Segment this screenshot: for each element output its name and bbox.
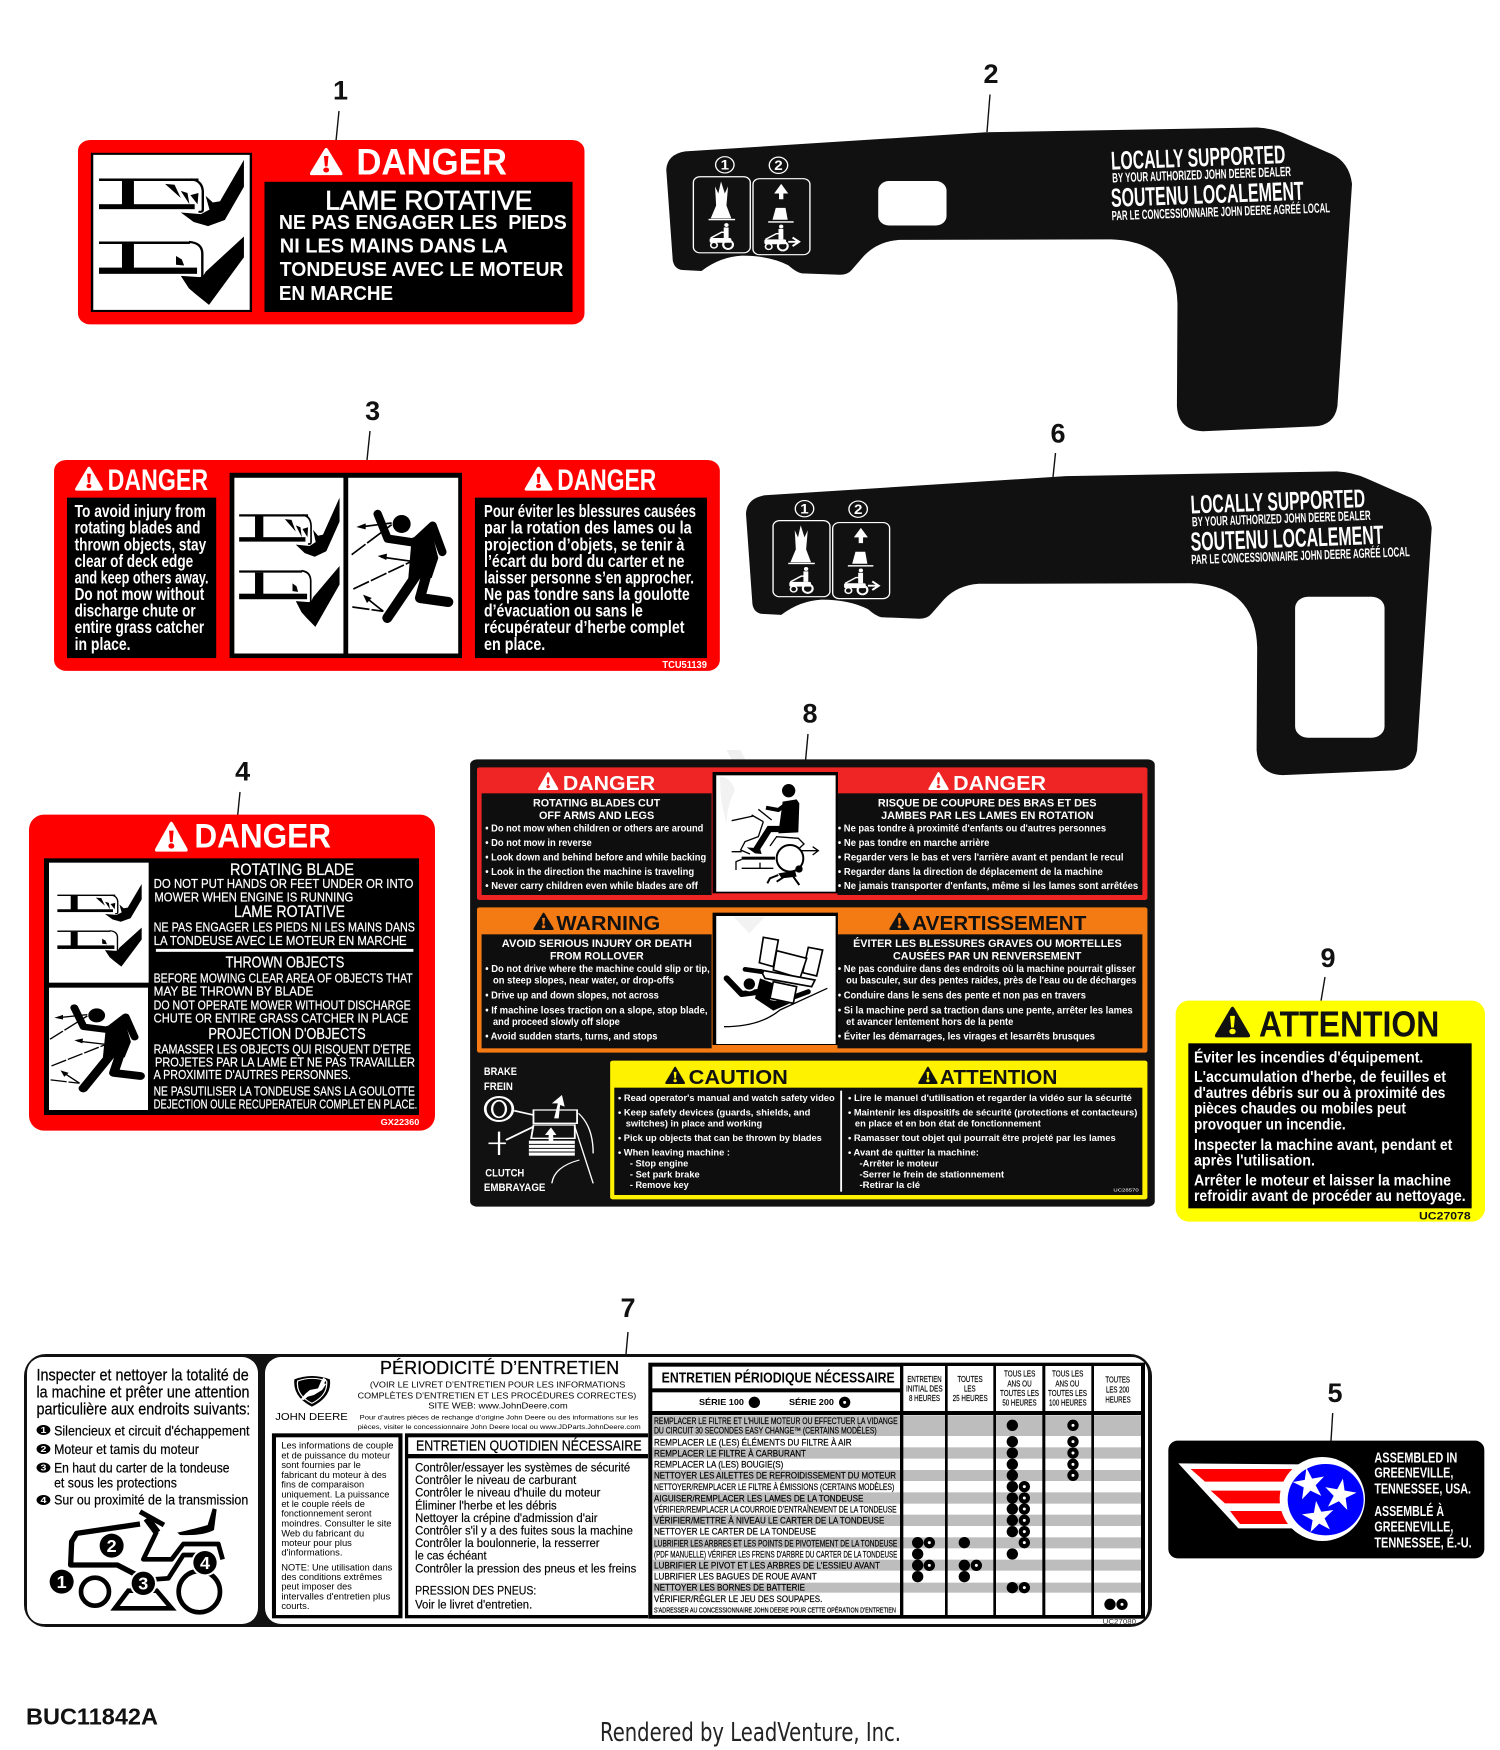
- text block: torque note: Les informations de couple: [281, 1442, 394, 1451]
- icon: brake and clutch: [484, 1065, 593, 1193]
- icon: brake and clutch: BRAKE: [484, 1065, 517, 1077]
- text block: french caution: en place et en bon état de fonctionnement: [855, 1119, 1041, 1129]
- title: periodicite d'entretien: Pour d’autres pièces de rechange d’origine John Deere ou des informations sur les: [360, 1413, 639, 1421]
- text block: french warning: d’évacuation ou sans le: [484, 601, 643, 620]
- text block: french caution: • Ramasser tout objet qui pourrait être projeté par les lames: [848, 1134, 1116, 1143]
- text block: inspection intro: particulière aux endroits suivants:: [37, 1399, 250, 1418]
- heading: caution: CAUTION: [689, 1066, 788, 1089]
- text block: torque note: d'informations.: [281, 1549, 343, 1558]
- text block: english warning: FROM ROLLOVER: [550, 949, 644, 962]
- text block: english danger: ROTATING BLADES CUT: [533, 797, 660, 809]
- heading: danger: DANGER: [356, 141, 507, 183]
- text block: warnings: A PROXIMITE D'AUTRES PERSONNES.: [154, 1067, 351, 1082]
- panel: red danger band: [477, 767, 1147, 900]
- text block: torque note: moindres. Consulter le site: [281, 1520, 392, 1529]
- text block: fire warning: provoquer un incendie.: [1194, 1116, 1346, 1133]
- icon: brake and clutch: CLUTCH: [485, 1167, 524, 1179]
- text block: french warning: • Ne pas conduire dans des endroits où la machine pourrait glisser: [838, 964, 1136, 974]
- text block: fire warning: Inspecter la machine avant, pendant et: [1194, 1137, 1452, 1154]
- heading: danger french: DANGER: [953, 772, 1046, 795]
- text block: english warning: AVOID SERIOUS INJURY OR DEATH: [502, 937, 692, 949]
- table rows: DU CIRCUIT 30 SECONDES EASY CHANGE™ (CERTAINS MODÈLES): [654, 1425, 877, 1435]
- callout number 7: [620, 1293, 636, 1354]
- callout number 8: 8: [802, 698, 818, 728]
- text block: fire warning: d'autres débris sur ou à proximité des: [1194, 1085, 1445, 1102]
- list: inspection points: 1: [41, 1426, 47, 1436]
- text block: english warning: and proceed slowly off slope: [493, 1017, 620, 1027]
- text block: english warning: [485, 937, 710, 1042]
- text block: english warning: entire grass catcher: [75, 617, 205, 637]
- text block: french caution: • Lire le manuel d'utilisation et regarder la vidéo sur la sécurité: [848, 1094, 1132, 1103]
- text block: english danger: [485, 797, 706, 891]
- icon: mower rollover: [713, 913, 838, 1045]
- text block: daily maintenance: ENTRETIEN QUOTIDIEN NÉCESSAIRE: [416, 1437, 642, 1454]
- text block: french warning: • Conduire dans le sens des pente et non pas en travers: [838, 990, 1086, 1001]
- callout number 8: [802, 698, 818, 760]
- list: inspection points: En haut du carter de la tondeuse: [54, 1461, 230, 1476]
- text block: fire warning: L'accumulation d'herbe, de feuilles et: [1194, 1069, 1446, 1086]
- heading: warning: [533, 912, 660, 935]
- text block: warnings: PROJECTION D'OBJECTS: [208, 1026, 366, 1043]
- table header: ENTRETIEN: [907, 1374, 942, 1384]
- table rows: NETTOYER LES AILETTES DE REFROIDISSEMENT DU MOTEUR: [654, 1471, 896, 1481]
- panel: decal 9 attention: [1176, 1001, 1485, 1222]
- heading: attention: ATTENTION: [1259, 1004, 1439, 1045]
- icon: tennessee wing and stars: [1178, 1457, 1365, 1541]
- list: inspection points: [37, 1424, 250, 1508]
- text block: daily maintenance: Contrôler le niveau d'huile du moteur: [415, 1486, 601, 1499]
- table header: HEURES: [1105, 1394, 1131, 1404]
- text block: french warning: et avancer lentement hors de la pente: [846, 1017, 1014, 1027]
- text block: daily maintenance: Nettoyer la crépine d'admission d'air: [415, 1511, 598, 1525]
- icon: warning triangle: [310, 148, 343, 175]
- text block: torque note: des conditions extrêmes: [281, 1573, 382, 1583]
- heading: right danger: [525, 463, 656, 497]
- text block: warnings: THROWN OBJECTS: [226, 954, 344, 971]
- table rows: REMPLACER LE FILTRE À CARBURANT: [654, 1449, 806, 1459]
- callout number 3: [365, 396, 380, 460]
- text block: assembled location: GREENEVILLE,: [1374, 1520, 1453, 1536]
- text block: french warning: NE PAS ENGAGER LES PIEDS: [279, 211, 567, 234]
- text block: french caution: UC28570: [1113, 1188, 1139, 1193]
- text block: warnings: [154, 860, 417, 1111]
- text block: french warning: Pour éviter les blessures causées: [484, 501, 696, 521]
- text block: english warning: • Avoid sudden starts, turns, and stops: [485, 1031, 657, 1042]
- list: inspection points: 3: [41, 1464, 47, 1473]
- callout number 3: 3: [365, 396, 380, 426]
- text block: english caution: - Set park brake: [630, 1170, 700, 1180]
- text block: french warning: [838, 937, 1136, 1042]
- text block: french warning: l’écart du bord du carter et ne: [484, 551, 684, 571]
- icon: lawn tractor with numbers: [50, 1508, 223, 1612]
- text block: torque note: uniquement. La puissance: [281, 1490, 390, 1500]
- text block: fire warning: Éviter les incendies d'équipement.: [1194, 1049, 1423, 1066]
- text block: english caution: [618, 1094, 835, 1190]
- text block: torque note: intervalles d'entretien plus: [281, 1592, 390, 1602]
- text block: warnings: LAME ROTATIVE: [234, 902, 345, 921]
- text block: warnings: ROTATING BLADE: [230, 860, 354, 879]
- callout number 4: 4: [235, 757, 250, 787]
- text block: inspection intro: [37, 1365, 250, 1418]
- text block: daily maintenance: Contrôler la boulonnerie, la resserrer: [415, 1536, 600, 1550]
- text block: english warning: • Drive up and down slopes, not across: [485, 990, 659, 1001]
- text block: warnings: DO NOT OPERATE MOWER WITHOUT DISCHARGE: [154, 998, 411, 1013]
- text block: torque note: et le couple réels de: [281, 1500, 365, 1510]
- part code: UC27080: [1103, 1617, 1136, 1626]
- title: periodicite d'entretien: (VOIR LE LIVRET D’ENTRETIEN POUR LES INFORMATIONS: [370, 1381, 625, 1389]
- callout number 1: 1: [333, 76, 348, 106]
- text block: english warning: [67, 498, 216, 658]
- table header: TOUTES: [1105, 1375, 1130, 1385]
- list: inspection points: Moteur et tamis du moteur: [54, 1442, 199, 1458]
- icon: blade and foot: [91, 153, 252, 312]
- panel: decal 5 assembled in tennessee: [1168, 1441, 1484, 1558]
- callout number 5: [1327, 1378, 1343, 1441]
- text block: french warning: laisser personne s’en approcher.: [484, 568, 694, 587]
- text block: fire warning: après l'utilisation.: [1194, 1152, 1315, 1169]
- table rows: S'ADRESSER AU CONCESSIONNAIRE JOHN DEERE POUR CETTE OPÉRATION D'ENTRETIEN: [654, 1606, 896, 1615]
- text block: french danger: • Ne pas tondre à proximité d'enfants ou d'autres personnes: [838, 823, 1106, 834]
- table dots: series 100: [912, 1420, 1116, 1610]
- text block: english danger: • Do not mow in reverse: [485, 838, 592, 848]
- part code: UC27078: [1419, 1210, 1471, 1222]
- table header: ENTRETIEN PÉRIODIQUE NÉCESSAIRE: [662, 1370, 895, 1387]
- text block: french caution: -Retirar la clé: [860, 1181, 920, 1190]
- panel: decal 4 danger rotating blade: [29, 815, 435, 1131]
- text block: english caution: • Read operator's manual and watch safety video: [618, 1094, 835, 1103]
- text block: french warning: par la rotation des lames ou la: [484, 518, 692, 537]
- text block: english warning: rotating blades and: [75, 518, 200, 537]
- title: periodicite d'entretien: pièces, visiter le concessionnaire John Deere local ou www.JDParts.JohnDeere.com: [358, 1423, 641, 1431]
- text block: english warning: discharge chute or: [75, 601, 196, 620]
- text block: english caution: switches) in place and working: [626, 1119, 762, 1129]
- panel: yellow caution band: [610, 1061, 1147, 1199]
- icon: lawn tractor with numbers: 1: [57, 1572, 67, 1592]
- text block: french warning: Ne pas tondre sans la goulotte: [484, 584, 690, 604]
- callout number 5: 5: [1327, 1378, 1343, 1408]
- text block: torque note: fonctionnement seront: [281, 1510, 372, 1519]
- text block: torque note: moteur pour plus: [281, 1539, 352, 1549]
- callout number 2: [983, 59, 999, 132]
- text block: daily maintenance: Contrôler la pression des pneus et les freins: [415, 1562, 637, 1575]
- title: periodicite d'entretien: COMPLÈTES D’ENTRETIEN ET LES PROCÉDURES CORRECTES): [358, 1391, 636, 1400]
- table: periodic maintenance: [648, 1363, 1145, 1626]
- text block: warnings: NE PASUTILISER LA TONDEUSE SANS LA GOULOTTE: [154, 1083, 415, 1098]
- icon: lawn tractor with numbers: 2: [107, 1536, 117, 1556]
- text block: assembled location: [1374, 1451, 1472, 1551]
- table rows: LUBRIFIER LE PIVOT ET LES ARBRES DE L'ESSIEU AVANT: [654, 1561, 880, 1571]
- table rows: REMPLACER LE FILTRE ET L'HUILE MOTEUR OU EFFECTUER LA VIDANGE: [654, 1416, 898, 1426]
- text block: assembled location: ASSEMBLÉ À: [1374, 1503, 1444, 1520]
- text block: french danger: • Ne pas tondre en marche arrière: [838, 838, 990, 848]
- text block: french warning: ou basculer, sur des pentes raides, près de l'eau ou de décharges: [846, 975, 1136, 986]
- icon: rider and child: [713, 772, 838, 893]
- text block: daily maintenance: PRESSION DES PNEUS:: [415, 1584, 536, 1597]
- text block: warnings: RAMASSER LES OBJECTS QUI RISQUENT D'ETRE: [154, 1042, 411, 1057]
- text block: french warning: EN MARCHE: [279, 281, 393, 305]
- text block: warnings: MAY BE THROWN BY BLADE: [154, 983, 313, 998]
- list: inspection points: 4: [41, 1496, 47, 1506]
- text block: english warning: clear of deck edge: [75, 551, 193, 571]
- icon: lawn tractor with numbers: 4: [200, 1553, 210, 1573]
- table header: TOUTES LES: [1048, 1388, 1087, 1398]
- text block: english caution: • When leaving machine :: [618, 1148, 730, 1158]
- table header: 50 HEURES: [1002, 1398, 1037, 1408]
- text block: french warning: • Éviter les démarrages, les virages et lesarrêts brusques: [838, 1031, 1095, 1042]
- callout number 2: 2: [983, 59, 999, 89]
- icon: john deere logo: [275, 1376, 348, 1423]
- left and middle content: [37, 1358, 648, 1618]
- table header: LES 200: [1106, 1385, 1129, 1395]
- table header: [662, 1369, 1131, 1408]
- callout number 7: 7: [620, 1293, 636, 1323]
- list: inspection points: et sous les protections: [54, 1476, 177, 1491]
- text block: torque note: peut imposer des: [281, 1583, 352, 1592]
- table dots: series 200: [924, 1420, 1128, 1610]
- text block: daily maintenance: [405, 1433, 648, 1618]
- table rows: NETTOYER LE CARTER DE LA TONDEUSE: [654, 1527, 816, 1537]
- icons: blade and thrown objects: [44, 858, 419, 1115]
- panel: decal 1 danger rotating blade: [78, 140, 584, 324]
- text block: french warning: [475, 498, 707, 658]
- text block: french danger: RISQUE DE COUPURE DES BRAS ET DES: [878, 797, 1097, 809]
- text block: french warning: ÉVITER LES BLESSURES GRAVES OU MORTELLES: [853, 937, 1122, 949]
- table rows: AIGUISER/REMPLACER LES LAMES DE LA TONDEUSE: [654, 1493, 863, 1503]
- table rows: LUBRIFIER LES ARBRES ET LES POINTS DE PIVOTEMENT DE LA TONDEUSE: [654, 1538, 897, 1548]
- text block: warnings: PROJETES PAR LA LAME ET NE PAS TRAVAILLER: [155, 1054, 415, 1069]
- text block: english warning: on steep slopes, near water, or drop-offs: [493, 975, 674, 986]
- text block: english danger: OFF ARMS AND LEGS: [539, 809, 655, 821]
- text block: english warning: thrown objects, stay: [75, 535, 207, 554]
- heading: left danger: DANGER: [108, 463, 208, 497]
- text block: torque note: fabricant du moteur à des: [281, 1471, 387, 1481]
- text block: french caution: -Arrêter le moteur: [860, 1159, 939, 1169]
- part code: TCU51139: [662, 660, 707, 671]
- panel: decal 8 safety labels: [470, 750, 1155, 1207]
- text block: fire warning: [1188, 1043, 1472, 1208]
- heading: danger english: [538, 772, 655, 795]
- callout number 9: 9: [1320, 943, 1336, 973]
- text block: torque note: sont fournies par le: [281, 1461, 361, 1471]
- text block: fire warning: Arrêter le moteur et laisser la machine: [1194, 1172, 1451, 1189]
- text block: warnings: BEFORE MOWING CLEAR AREA OF OBJECTS THAT: [154, 971, 413, 986]
- table header: 8 HEURES: [909, 1393, 940, 1403]
- icon: brake and clutch: EMBRAYAGE: [484, 1181, 546, 1193]
- text block: warnings: CHUTE OR ENTIRE GRASS CATCHER IN PLACE: [154, 1011, 408, 1026]
- icon: john deere logo: JOHN DEERE: [275, 1412, 348, 1423]
- text block: french warning: • Si la machine perd sa traction dans une pente, arrêter les lames: [838, 1005, 1133, 1016]
- callout number 6: 6: [1050, 418, 1066, 448]
- text block: torque note: [272, 1433, 402, 1618]
- table rows: REMPLACER LE (LES) ÉLÉMENTS DU FILTRE À AIR: [654, 1437, 852, 1447]
- text block: french warning: NI LES MAINS DANS LA: [280, 234, 508, 257]
- callout number 4: [235, 757, 250, 815]
- table header: TOUTES LES: [1000, 1388, 1039, 1398]
- table header: TOUTES: [957, 1374, 983, 1384]
- text block: fire warning: refroidir avant de procéder au nettoyage.: [1194, 1188, 1466, 1205]
- text block: daily maintenance: Contrôler/essayer les systèmes de sécurité: [415, 1461, 630, 1474]
- table header: TOUS LES: [1052, 1369, 1083, 1379]
- part code: GX22360: [381, 1117, 420, 1127]
- text block: french warning: récupérateur d’herbe complet: [484, 617, 685, 637]
- text block: daily maintenance: Contrôler le niveau de carburant: [415, 1473, 577, 1487]
- heading: right danger: DANGER: [557, 463, 656, 497]
- text block: torque note: NOTE: Une utilisation dans: [281, 1563, 392, 1573]
- text block: english danger: • Never carry children even while blades are off: [485, 881, 698, 891]
- text block: torque note: et de puissance du moteur: [281, 1451, 391, 1461]
- table rows: NETTOYER/REMPLACER LE FILTRE À ÉMISSIONS (CERTAINS MODÈLES): [654, 1482, 894, 1492]
- table rows: NETTOYER LES BORNES DE BATTERIE: [654, 1583, 805, 1593]
- text block: fire warning: pièces chaudes ou mobiles peut: [1194, 1101, 1406, 1118]
- title: periodicite d'entretien: PÉRIODICITÉ D’ENTRETIEN: [380, 1358, 619, 1378]
- heading: danger english: DANGER: [563, 772, 655, 795]
- text block: warnings: DO NOT PUT HANDS OR FEET UNDER OR INTO: [154, 876, 413, 891]
- text block: assembled location: GREENEVILLE,: [1374, 1466, 1453, 1482]
- text block: french warning: CAUSÉES PAR UN RENVERSEMENT: [893, 949, 1081, 962]
- heading: danger french: [928, 772, 1046, 795]
- text block: french danger: • Regarder dans la direction de déplacement de la machine: [838, 867, 1103, 877]
- callout number 9: [1320, 943, 1336, 1001]
- table header: SÉRIE 200: [789, 1397, 834, 1407]
- table header: 100 HEURES: [1049, 1398, 1087, 1408]
- list: inspection points: Sur ou proximité de la transmission: [54, 1493, 248, 1508]
- text block: english caution: • Keep safety devices (guards, shields, and: [618, 1108, 810, 1118]
- title: periodicite d'entretien: [358, 1358, 641, 1431]
- text block: english warning: in place.: [75, 634, 131, 653]
- table header: SÉRIE 100: [699, 1397, 744, 1407]
- table rows: VÉRIFIER/RÉGLER LE JEU DES SOUPAPES.: [654, 1594, 822, 1604]
- panel: decal 7 maintenance: [24, 1354, 1152, 1627]
- text block: english warning: and keep others away.: [75, 568, 209, 587]
- renderer credit: Rendered by LeadVenture, Inc.: [600, 1718, 901, 1748]
- table header: 25 HEURES: [953, 1393, 988, 1403]
- text block: english caution: - Remove key: [630, 1181, 689, 1190]
- figure code: BUC11842A: [26, 1704, 158, 1730]
- heading: avertissement: AVERTISSEMENT: [912, 912, 1086, 935]
- icons: blade and thrown objects: [230, 473, 462, 658]
- panel: decal 3 danger bilingual: [54, 460, 720, 671]
- text block: french caution: • Avant de quitter la machine:: [848, 1148, 979, 1158]
- table header: LES: [964, 1384, 976, 1394]
- table header: INITIAL DES: [906, 1384, 943, 1394]
- text block: warnings: LA TONDEUSE AVEC LE MOTEUR EN MARCHE: [154, 933, 407, 948]
- heading: left danger: [75, 463, 208, 497]
- text block: french danger: • Regarder vers le bas et vers l'arrière avant et pendant le recul: [838, 852, 1124, 863]
- list: inspection points: 2: [41, 1445, 46, 1455]
- heading: avertissement: [889, 912, 1086, 935]
- table rows: VÉRIFIER/REMPLACER LA COURROIE D’ENTRAÎNEMENT DE LA TONDEUSE: [654, 1504, 897, 1514]
- text block: french danger: JAMBES PAR LES LAMES EN ROTATION: [881, 809, 1094, 821]
- text block: english warning: Do not mow without: [75, 584, 205, 604]
- text block: french caution: • Maintenir les dispositifs de sécurité (protections et contacteurs): [848, 1108, 1138, 1118]
- text block: english danger: • Do not mow when children or others are around: [485, 823, 703, 834]
- table header: ANS OU: [1007, 1378, 1032, 1388]
- table rows: (PDF MANUELLE) VÉRIFIER LES FREINS D'ARBRE DU CARTER DE LA TONDEUSE: [654, 1549, 897, 1559]
- table header: TOUS LES: [1004, 1369, 1035, 1379]
- title: periodicite d'entretien: SITE WEB: www.JohnDeere.com: [428, 1402, 568, 1410]
- text block: english warning: • Do not drive where the machine could slip or tip,: [485, 964, 710, 974]
- text block: english caution: - Stop engine: [630, 1159, 688, 1169]
- text block: english warning: To avoid injury from: [75, 501, 206, 521]
- text block: torque note: courts.: [281, 1602, 309, 1612]
- text block: french warning: en place.: [484, 634, 545, 653]
- text block: daily maintenance: Voir le livret d'entretien.: [415, 1598, 532, 1611]
- text block: daily maintenance: le cas échéant: [415, 1549, 487, 1562]
- table rows: VÉRIFIER/METTRE À NIVEAU LE CARTER DE LA TONDEUSE: [654, 1516, 884, 1526]
- icon: brake and clutch: FREIN: [484, 1080, 513, 1092]
- text block: english caution: • Pick up objects that can be thrown by blades: [618, 1134, 822, 1143]
- text block: french caution: [848, 1094, 1139, 1193]
- text block: daily maintenance: Éliminer l'herbe et les débris: [415, 1499, 557, 1512]
- heading: caution: [665, 1066, 788, 1089]
- text block: daily maintenance: Contrôler s'il y a des fuites sous la machine: [415, 1524, 633, 1537]
- text block: warnings: NE PAS ENGAGER LES PIEDS NI LES MAINS DANS: [154, 919, 415, 934]
- text block: french warning: [264, 182, 573, 312]
- text block: torque note: fins de comparaison: [281, 1481, 364, 1490]
- table rows: [654, 1416, 898, 1615]
- text block: english danger: • Look down and behind before and while backing: [485, 852, 706, 863]
- table rows: REMPLACER LA (LES) BOUGIE(S): [654, 1460, 783, 1470]
- text block: french danger: • Ne jamais transporter d'enfants, même si les lames sont arrêtées: [838, 881, 1138, 891]
- heading: attention: [918, 1066, 1057, 1089]
- text block: french warning: LAME ROTATIVE: [325, 186, 532, 216]
- text block: french danger: [838, 797, 1138, 891]
- table header: ANS OU: [1055, 1378, 1079, 1388]
- text block: assembled location: ASSEMBLED IN: [1374, 1451, 1457, 1467]
- heading: attention: ATTENTION: [940, 1066, 1057, 1089]
- text block: french warning: projection d’objets, se tenir à: [484, 535, 685, 554]
- table rows: LUBRIFIER LES BAGUES DE ROUE AVANT: [654, 1572, 817, 1582]
- text block: warnings: DEJECTION OULE RECUPERATEUR COMPLET EN PLACE.: [154, 1096, 417, 1111]
- callout number 1: [333, 76, 348, 141]
- text block: english danger: • Look in the direction the machine is traveling: [485, 867, 694, 877]
- text block: inspection intro: la machine et prêter une attention: [37, 1382, 249, 1401]
- text block: warnings: MOWER WHEN ENGINE IS RUNNING: [154, 889, 353, 904]
- text block: english warning: • If machine loses traction on a slope, stop blade,: [485, 1005, 708, 1016]
- text block: torque note: Web du fabricant du: [281, 1529, 364, 1539]
- list: inspection points: Silencieux et circuit d'échappement: [54, 1424, 250, 1439]
- heading: danger: DANGER: [194, 818, 331, 856]
- text block: inspection intro: Inspecter et nettoyer la totalité de: [37, 1365, 249, 1384]
- text block: french warning: TONDEUSE AVEC LE MOTEUR: [280, 257, 563, 281]
- callout number 6: [1050, 418, 1066, 477]
- panel: decal 2 locally supported: [666, 127, 1352, 431]
- text block: french caution: -Serrer le frein de stationnement: [860, 1170, 1004, 1180]
- heading: warning: WARNING: [556, 912, 660, 935]
- panel: decal 6 locally supported: [746, 471, 1432, 775]
- panel: orange warning band: [477, 907, 1147, 1199]
- icon: lawn tractor with numbers: 3: [138, 1574, 148, 1594]
